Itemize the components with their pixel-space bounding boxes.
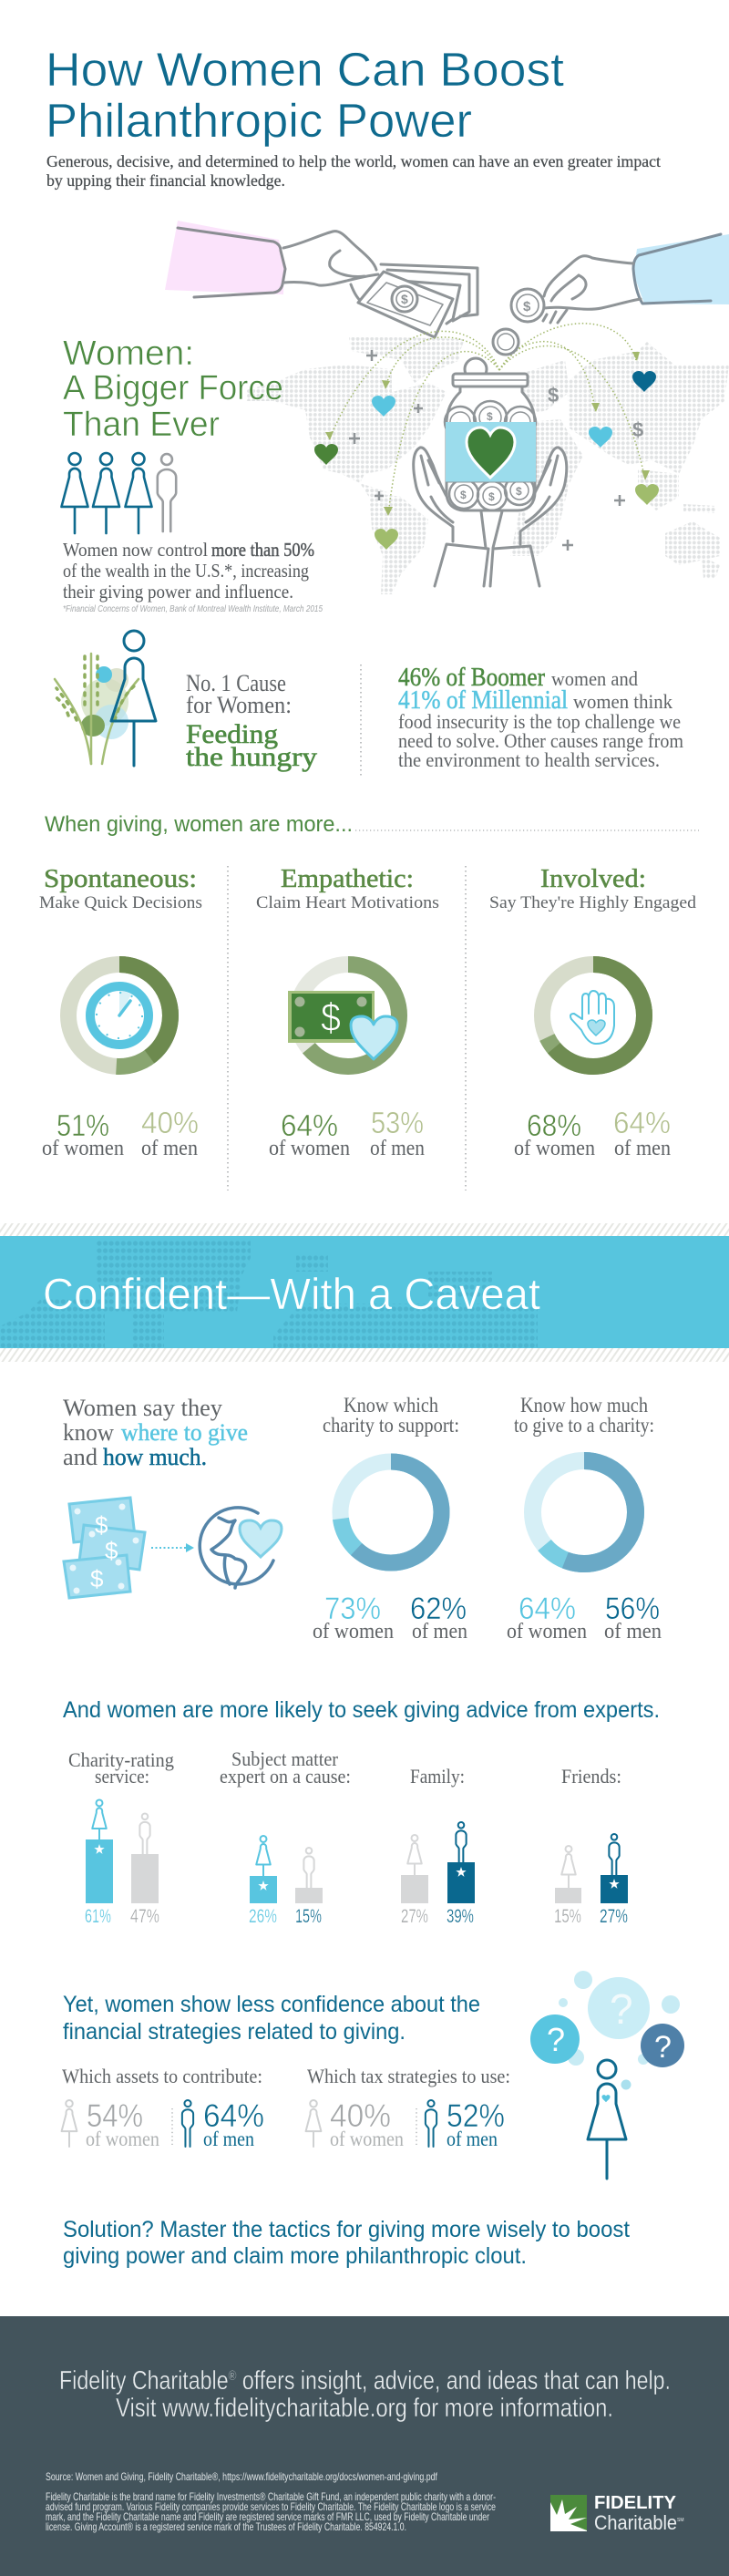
subtitle: Generous, decisive, and determined to help the world, women can have an even greater impact <box>46 152 661 170</box>
chart: know which charity: of men <box>412 1620 467 1643</box>
icon: woman with question bubbles: ? <box>547 2021 565 2058</box>
footnote: *Financial Concerns of Women, Bank of Montreal Wealth Institute, March 2015 <box>63 604 323 614</box>
bar chart: charity-rating service: 61% <box>85 1906 111 1927</box>
bar chart: family: 27% <box>401 1906 428 1927</box>
source and legal text: advised fund program. Various Fidelity companies provide services to Fidelity Charitable. The Fidelity Charitable logo is a service <box>46 2500 496 2513</box>
bar chart: charity-rating service: Charity-rating <box>68 1748 174 1771</box>
icon: three bills: $ <box>95 1511 108 1539</box>
panel: empathetic: Empathetic: <box>281 865 414 893</box>
world map dots <box>246 337 729 594</box>
icon: three women and one man <box>61 453 176 533</box>
call to action: Visit www.fidelitycharitable.org for more information. <box>116 2394 613 2423</box>
icon: woman with question bubbles <box>530 1971 684 2179</box>
icons: hearts around jar <box>314 371 659 550</box>
illustration: hands holding jar of coins: $ <box>488 490 495 503</box>
text: solution <box>63 2217 630 2269</box>
logo: fidelity charitable: Charitable <box>594 2511 677 2534</box>
panel: involved: Involved: <box>540 865 646 893</box>
illustration: dotted arcs with arrows <box>325 324 650 516</box>
stat: which tax strategies: of men <box>447 2128 498 2150</box>
chart: know how much: to give to a charity: <box>514 1414 654 1437</box>
chart: know how much: of women <box>507 1620 587 1643</box>
chart: know which charity: 62% <box>410 1592 467 1626</box>
illustration: hands holding jar of coins <box>414 358 567 586</box>
text: no. 1 cause: the hungry <box>186 742 317 772</box>
chart: know how much: of men <box>604 1620 662 1643</box>
stat: which assets to contribute: 54% <box>87 2098 143 2134</box>
heading: women a bigger force <box>63 335 283 444</box>
stats: involved: of men <box>614 1137 671 1160</box>
icon: dollar bill with heart: $ <box>321 995 341 1040</box>
stats: involved: of women <box>514 1137 595 1160</box>
text: boomer and millennial stat: food insecurity is the top challenge we <box>398 710 681 733</box>
source and legal text: Source: Women and Giving, Fidelity Charitable®, https://www.fidelitycharitable.org/docs/women-and-giving.pdf <box>46 2470 437 2483</box>
icon: three bills <box>64 1498 145 1598</box>
donut: how much <box>532 1460 636 1564</box>
banner: confident with a caveat <box>0 1223 729 1362</box>
text: no. 1 cause: for Women: <box>186 692 292 718</box>
illustration: hand giving money <box>165 221 477 337</box>
heading: less confidence <box>63 1992 480 2045</box>
text: boomer and millennial stat <box>398 664 683 771</box>
icons: plus and dollar marks: $ <box>632 418 643 441</box>
heading: when giving: When giving, women are more... <box>45 812 353 837</box>
text: women control wealth: more than 50% <box>211 539 314 561</box>
icons: plus and dollar marks <box>349 350 643 551</box>
stat: which tax strategies: of women <box>330 2128 404 2150</box>
banner: confident with a caveat: Confident—With a Caveat <box>43 1271 540 1319</box>
subtitle <box>46 152 661 190</box>
stats: empathetic: 64% <box>281 1108 338 1142</box>
text: women say they know: know <box>63 1419 114 1446</box>
text: boomer and millennial stat: women and <box>551 667 638 690</box>
stats: spontaneous <box>42 1106 199 1160</box>
text: no. 1 cause: No. 1 Cause <box>186 670 286 696</box>
icon: woman with question bubbles: ? <box>610 1985 633 2033</box>
stat: which tax strategies: 52% <box>447 2098 505 2134</box>
illustration: hands holding jar of coins: $ <box>487 410 493 423</box>
bar chart: friends: 27% <box>600 1906 628 1927</box>
panel: involved <box>489 865 697 1160</box>
text: solution: giving power and claim more philanthropic clout. <box>63 2243 527 2269</box>
panel: involved: Say They're Highly Engaged <box>489 893 697 912</box>
panel: empathetic <box>256 865 439 1160</box>
stats: spontaneous: of women <box>42 1137 124 1160</box>
panel: empathetic: Claim Heart Motivations <box>256 893 439 912</box>
logo: fidelity charitable <box>550 2493 683 2534</box>
stat: which tax strategies <box>306 2065 510 2150</box>
icon: three bills: $ <box>105 1537 118 1564</box>
bar chart: charity-rating service: 47% <box>130 1906 159 1927</box>
icon: dollar bill with heart <box>288 991 397 1059</box>
heading: women a bigger force: Women: <box>63 335 194 373</box>
bar chart: family <box>401 1765 475 1927</box>
source and legal text: Fidelity Charitable is the brand name for Fidelity Investments® Charitable Gift Fund, an independent public charity with a donor- <box>46 2490 496 2503</box>
stat: which assets to contribute: of men <box>203 2128 254 2150</box>
chart: know which charity: Know which <box>344 1394 438 1417</box>
stats: involved <box>514 1106 671 1160</box>
icon: falling coin <box>493 329 519 355</box>
source and legal text <box>46 2470 496 2533</box>
text: boomer and millennial stat: the environment to health services. <box>398 748 660 771</box>
text: boomer and millennial stat: women think <box>573 690 673 713</box>
chart: know how much <box>507 1394 662 1643</box>
stat: which assets to contribute <box>62 2065 264 2150</box>
stat: which tax strategies: Which tax strategies to use: <box>307 2065 510 2087</box>
stats: empathetic: of men <box>370 1137 425 1160</box>
text: women control wealth: of the wealth in the U.S.*, increasing <box>63 560 309 582</box>
text: women control wealth <box>63 539 314 603</box>
panel: footer <box>0 2316 729 2576</box>
text: boomer and millennial stat: 41% of Millennial <box>398 686 568 715</box>
bar chart: subject matter expert <box>220 1747 351 1927</box>
icon: globe with heart <box>200 1508 282 1588</box>
donut chart: empathetic <box>297 964 399 1066</box>
bar chart: subject matter expert: 15% <box>295 1906 322 1927</box>
stats: empathetic: of women <box>269 1137 350 1160</box>
illustration: hand giving money: $ <box>401 292 408 306</box>
stats: involved: 68% <box>527 1108 581 1142</box>
bar chart: friends: Friends: <box>561 1765 621 1788</box>
text: boomer and millennial stat: 46% of Boomer <box>398 664 546 692</box>
source and legal text: mark, and the Fidelity Charitable name and Fidelity are registered service marks of FMR LLC, used by Fidelity Charitable under <box>46 2510 489 2523</box>
chart: know how much: 56% <box>605 1592 660 1626</box>
icon: open hand with heart <box>570 991 614 1044</box>
stats: spontaneous: of men <box>141 1137 198 1160</box>
text: no. 1 cause <box>186 670 317 772</box>
icon: clock <box>90 986 149 1045</box>
arrow: to globe <box>151 1543 194 1552</box>
chart: know which charity: 73% <box>324 1592 381 1626</box>
illustration: hand giving coin <box>511 234 729 323</box>
bar chart: family: 39% <box>447 1906 474 1927</box>
icon: woman with wheat <box>53 631 156 766</box>
bar chart: charity-rating service: service: <box>95 1765 149 1788</box>
panel: spontaneous <box>39 865 202 1160</box>
chart: know which charity: of women <box>313 1620 394 1643</box>
donut: which charity <box>341 1462 441 1562</box>
text: women say they know: where to give <box>121 1419 248 1446</box>
stats: empathetic <box>269 1106 425 1160</box>
chart: know which charity <box>313 1394 467 1643</box>
heading: less confidence: financial strategies related to giving. <box>63 2019 406 2045</box>
bar chart: subject matter expert: Subject matter <box>231 1747 339 1770</box>
title: Philanthropic Power <box>46 95 472 148</box>
bar chart: charity-rating service <box>68 1748 174 1927</box>
call to action: ® <box>229 2368 236 2384</box>
illustration: hands holding jar of coins: $ <box>516 485 522 498</box>
title <box>46 44 565 148</box>
stat: which assets to contribute: 64% <box>203 2098 264 2134</box>
heading: seek giving advice: And women are more likely to seek giving advice from experts. <box>63 1697 660 1723</box>
text: women control wealth: Women now control <box>63 539 208 561</box>
panel: spontaneous: Make Quick Decisions <box>39 893 202 912</box>
text: women say they know: Women say they <box>63 1395 222 1421</box>
bar chart: friends <box>554 1765 628 1927</box>
bar chart: friends: 15% <box>554 1906 581 1927</box>
bar chart: family: Family: <box>410 1765 465 1788</box>
illustration: hand giving coin: $ <box>523 299 531 314</box>
stats: involved: 64% <box>613 1106 671 1139</box>
subtitle: by upping their financial knowledge. <box>46 171 285 190</box>
donut chart: involved <box>542 964 644 1066</box>
call to action <box>59 2366 671 2423</box>
stats: empathetic: 53% <box>371 1106 424 1139</box>
stat: which tax strategies: 40% <box>330 2098 391 2134</box>
heading: women a bigger force: A Bigger Force <box>63 369 283 407</box>
chart: know how much: 64% <box>519 1592 576 1626</box>
icon: three bills: $ <box>90 1565 104 1592</box>
stat: which assets to contribute: of women <box>86 2128 159 2150</box>
text: solution: Solution? Master the tactics for giving more wisely to boost <box>63 2217 630 2242</box>
text: women say they know: how much. <box>103 1444 207 1470</box>
text: women say they know: and <box>63 1444 98 1470</box>
text: women control wealth: their giving power and influence. <box>63 581 293 603</box>
heading: women a bigger force: Than Ever <box>63 406 220 444</box>
call to action: Fidelity Charitable <box>59 2366 271 2396</box>
heading: less confidence: Yet, women show less confidence about the <box>63 1992 480 2017</box>
text: no. 1 cause: Feeding <box>186 719 278 749</box>
logo: fidelity charitable: SM <box>677 2518 683 2523</box>
chart: know how much: Know how much <box>520 1394 648 1417</box>
stat: which assets to contribute: Which assets to contribute: <box>62 2065 262 2087</box>
source and legal text: license. Giving Account® is a registered service mark of the Trustees of Fidelity Charitable. 854924.1.0. <box>46 2520 406 2533</box>
icons: plus and dollar marks: $ <box>548 384 559 407</box>
donut chart: spontaneous <box>68 964 170 1066</box>
text: boomer and millennial stat: need to solve. Other causes range from <box>398 729 683 752</box>
stats: spontaneous: 40% <box>141 1106 199 1139</box>
text: women say they know <box>63 1395 248 1470</box>
chart: know which charity: charity to support: <box>323 1414 459 1437</box>
bar chart: subject matter expert: 26% <box>249 1906 277 1927</box>
stats: spontaneous: 51% <box>56 1108 109 1142</box>
icon: woman with question bubbles: ? <box>654 2030 672 2065</box>
logo: fidelity charitable: FIDELITY <box>594 2493 677 2513</box>
panel: spontaneous: Spontaneous: <box>44 865 197 893</box>
bar chart: subject matter expert: expert on a cause: <box>220 1765 351 1788</box>
title: How Women Can Boost <box>46 44 565 97</box>
illustration: hands holding jar of coins: $ <box>460 489 467 501</box>
